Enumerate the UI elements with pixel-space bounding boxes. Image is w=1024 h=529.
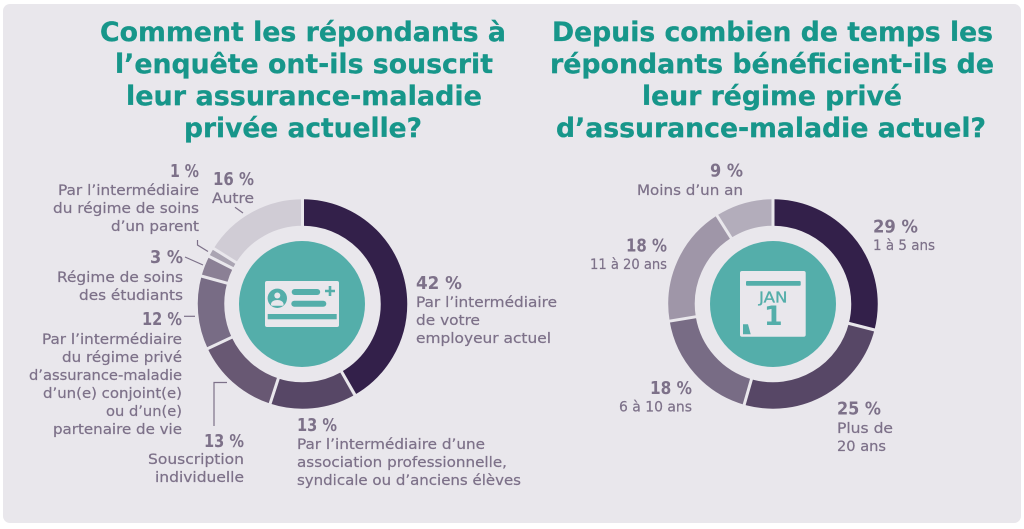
label: 25 % [837, 400, 893, 455]
label: 9 % [637, 162, 743, 199]
label: 42 % [416, 274, 557, 347]
label: 9 %: Moins d’un an [637, 183, 743, 199]
icon: insurance card [239, 241, 365, 367]
title: left question [100, 17, 506, 144]
title: left question: l’enquête ont-ils souscrit [115, 49, 493, 80]
label: 25 %: 25 % [837, 400, 881, 420]
label: 13 % association [297, 416, 521, 489]
label: 13 % individuelle: 13 % [204, 432, 244, 452]
label: 1 %: du régime de soins [53, 201, 199, 217]
title: right question: Depuis combien de temps les [552, 17, 993, 48]
label: 12 %: d’assurance-maladie [29, 368, 182, 384]
label: 12 %: 12 % [142, 310, 182, 330]
label: 29 %: 29 % [873, 218, 918, 238]
title: right question [550, 17, 994, 144]
label: 1 % [53, 162, 199, 235]
title: left question: leur assurance-maladie [126, 81, 482, 112]
label: 3 %: 3 % [150, 248, 183, 268]
label: 29 %: 1 à 5 ans [873, 238, 935, 254]
label: 3 %: des étudiants [79, 288, 183, 304]
label: 13 % individuelle [148, 432, 244, 486]
label: 16 % [212, 170, 254, 207]
label: 12 %: partenaire de vie [53, 422, 182, 438]
label: 25 %: 20 ans [837, 439, 886, 455]
label: 18 % 11 à 20 ans: 18 % [626, 236, 667, 256]
label: 42 %: Par l’intermédiaire [416, 295, 557, 311]
title: left question: privée actuelle? [184, 113, 422, 144]
label: 18 % 11 à 20 ans [590, 236, 667, 273]
label: 13 % individuelle: individuelle [155, 470, 244, 486]
icon: calendar [710, 241, 836, 367]
label: 1 %: 1 % [170, 162, 199, 182]
label: 16 %: Autre [212, 191, 254, 207]
title: left question: Comment les répondants à [100, 17, 506, 48]
label: 12 %: d’un(e) conjoint(e) [43, 386, 182, 402]
label: 16 %: 16 % [213, 170, 254, 190]
label: 42 %: employeur actuel [416, 331, 551, 347]
title: right question: d’assurance-maladie actuel? [556, 113, 986, 144]
label: 13 % individuelle: Souscription [148, 452, 244, 468]
label: 18 % 11 à 20 ans: 11 à 20 ans [590, 257, 667, 273]
label: 3 % [57, 248, 183, 304]
label: 42 %: 42 % [416, 274, 462, 294]
label: 13 % association: association professionnelle, [297, 455, 507, 471]
label: 18 % 6 à 10 ans [619, 379, 692, 416]
label: 3 %: Régime de soins [57, 270, 183, 286]
label: 9 %: 9 % [710, 162, 743, 182]
label: 13 % association: 13 % [297, 416, 337, 436]
title: right question: répondants bénéficient-ils de [550, 49, 994, 80]
label: 12 %: Par l’intermédiaire [42, 332, 182, 348]
donut chart: souscription [176, 178, 429, 430]
label: 12 %: du régime privé [62, 350, 182, 366]
label: 1 %: Par l’intermédiaire [58, 183, 199, 199]
leader lines: left chart [184, 207, 243, 426]
label: 42 %: de votre [416, 313, 480, 329]
title: right question: leur régime privé [642, 81, 902, 112]
label: 1 %: d’un parent [111, 219, 199, 235]
label: 29 % [873, 218, 935, 254]
icon: calendar: JAN [758, 289, 788, 307]
label: 12 %: ou d’un(e) [106, 404, 182, 420]
icon: calendar: 1 [764, 301, 783, 332]
label: 25 %: Plus de [837, 421, 893, 437]
donut chart: durée [647, 178, 899, 430]
label: 18 % 6 à 10 ans: 6 à 10 ans [619, 400, 692, 416]
label: 13 % association: Par l’intermédiaire d’une [297, 437, 485, 453]
label: 13 % association: syndicale ou d’anciens élèves [297, 473, 521, 489]
label: 12 % [29, 310, 182, 438]
label: 18 % 6 à 10 ans: 18 % [650, 379, 692, 399]
